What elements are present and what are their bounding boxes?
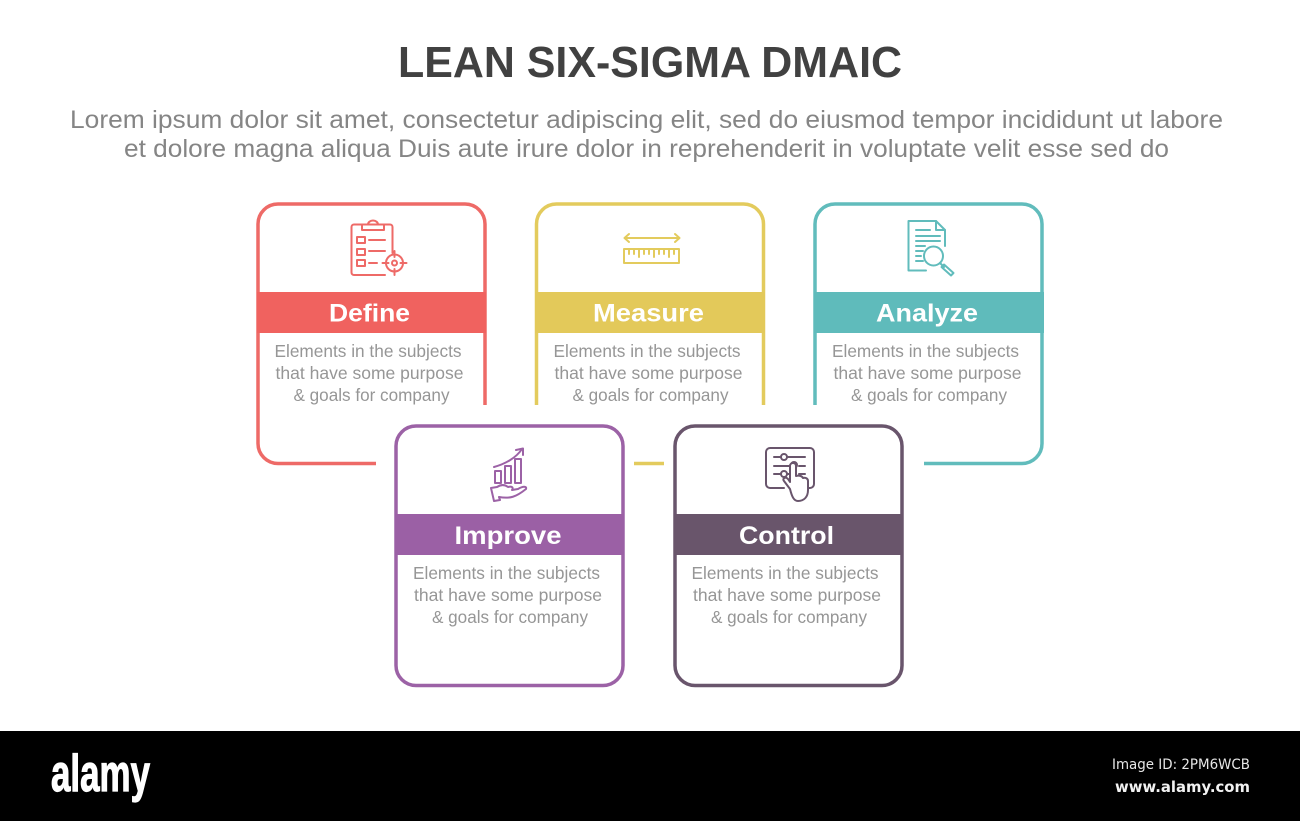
title: LEAN SIX-SIGMA DMAIC	[398, 38, 902, 87]
text block: define: Elements in the subjects	[274, 341, 462, 361]
footer bar	[0, 731, 1300, 821]
icon: chart on hand	[491, 448, 526, 501]
text block: control: Elements in the subjects	[692, 563, 879, 583]
text block: define: & goals for company	[294, 385, 450, 405]
image id: Image ID: 2PM6WCB	[1112, 757, 1250, 773]
subtitle text: Lorem ipsum dolor sit amet, consectetur adipiscing elit, sed do eiusmod tempor incididunt ut labore	[70, 106, 1223, 134]
text block: measure	[554, 341, 742, 405]
text block: analyze: & goals for company	[851, 385, 1007, 405]
subtitle text: et dolore magna aliqua Duis aute irure dolor in reprehenderit in voluptate velit esse sed do	[124, 135, 1169, 163]
panel: improve	[395, 426, 624, 686]
text block: measure: Elements in the subjects	[554, 341, 741, 361]
icon: clipboard with target	[352, 220, 406, 275]
text block: analyze: Elements in the subjects	[832, 341, 1019, 361]
text block: define	[274, 341, 464, 405]
heading: measure: Measure	[593, 300, 704, 328]
website: www.alamy.com	[1115, 778, 1250, 796]
text block: control: & goals for company	[711, 607, 867, 627]
text block: improve	[413, 563, 602, 627]
heading: define: Define	[329, 300, 410, 328]
panel: analyze	[814, 204, 1044, 464]
icon: ruler with arrow	[624, 234, 680, 263]
text block: improve: that have some purpose	[414, 585, 602, 605]
text block: improve: & goals for company	[432, 607, 588, 627]
text block: measure: that have some purpose	[554, 363, 742, 383]
heading: control: Control	[739, 522, 834, 550]
heading: analyze: Analyze	[876, 300, 978, 328]
logo: alamy: alamy	[51, 745, 150, 803]
text block: analyze: that have some purpose	[834, 363, 1022, 383]
text block: control: that have some purpose	[693, 585, 881, 605]
icon: sliders with pointing hand	[766, 448, 814, 501]
panel: define	[257, 204, 486, 464]
icon: document with magnifier	[908, 221, 954, 276]
text block: analyze	[832, 341, 1022, 405]
heading: improve: Improve	[454, 522, 562, 550]
text block: improve: Elements in the subjects	[413, 563, 600, 583]
panel: measure	[535, 204, 765, 464]
panel: control	[674, 426, 903, 686]
text block: measure: & goals for company	[572, 385, 729, 405]
subtitle text	[70, 106, 1223, 163]
text block: control	[692, 563, 881, 627]
text block: define: that have some purpose	[276, 363, 464, 383]
